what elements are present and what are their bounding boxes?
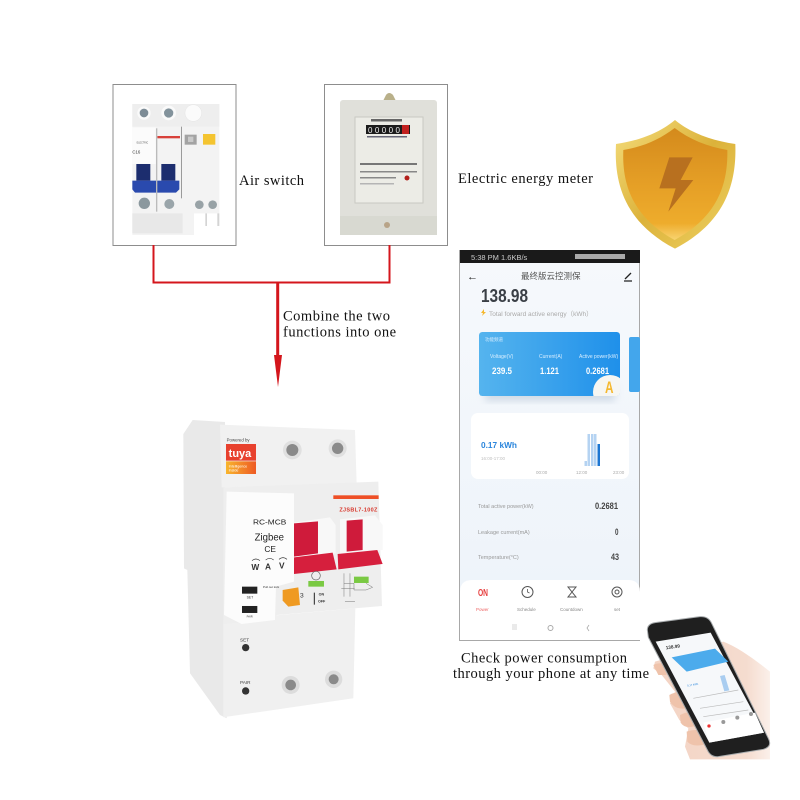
bottom terminal screws xyxy=(282,671,342,694)
set and pair sliders: SET xyxy=(247,595,253,599)
on/off marking: OFF xyxy=(318,600,326,604)
set button xyxy=(240,637,249,651)
bottom navigation: Power xyxy=(476,607,489,612)
caption: check power consumption: through your phone at any time xyxy=(453,666,649,682)
label: air switch: Air switch xyxy=(239,173,305,189)
icon: air switch photo: C16 xyxy=(132,150,141,155)
energy chart card: 12:00 xyxy=(576,470,588,475)
green indicators xyxy=(308,577,369,587)
set and pair sliders xyxy=(242,587,257,619)
bottom navigation: Schedule xyxy=(517,607,536,612)
blue measurement card: 239.5 xyxy=(492,366,513,377)
phone screen: 0.17 kWh xyxy=(687,682,699,688)
breaker toggle right xyxy=(338,515,383,569)
set and pair sliders: PAIR xyxy=(247,615,253,619)
tuya logo: tuya xyxy=(229,448,252,460)
blue measurement card: A xyxy=(605,378,614,397)
card shadow xyxy=(485,385,615,401)
phone screenshot panel xyxy=(460,250,640,640)
energy chart card: 16:00-17:00 xyxy=(481,456,506,461)
icon: gold shield with lightning bolt xyxy=(616,120,735,249)
set button: SET xyxy=(240,637,249,642)
icon: air switch photo: ELECTRIC xyxy=(137,143,148,145)
tuya logo: Inside xyxy=(229,469,238,473)
on/off marking: ON xyxy=(319,592,324,596)
meters W A V: W xyxy=(251,562,259,572)
data rows: Leakage current(mA) xyxy=(478,530,530,536)
label: RC-MCB: RC-MCB xyxy=(253,517,286,526)
data rows: Temperature(°C) xyxy=(478,555,519,561)
blue measurement card: Active power(kW) xyxy=(579,354,619,360)
blue measurement card: 功能频道 xyxy=(485,336,503,343)
caption: check power consumption xyxy=(453,651,649,682)
text: combine the two functions: Combine the two xyxy=(283,308,390,324)
white label panel xyxy=(224,492,294,624)
status bar xyxy=(460,250,640,263)
certification mark xyxy=(312,571,320,580)
pair button: PAIR xyxy=(240,680,251,685)
meters W A V: V xyxy=(279,561,285,571)
energy value: 138.98 xyxy=(481,286,528,306)
energy chart card xyxy=(471,413,629,479)
hand holding phone xyxy=(647,617,770,759)
data rows: 0 xyxy=(615,527,618,538)
back arrow: ← xyxy=(467,271,478,283)
middle block xyxy=(223,482,382,624)
energy chart card: 23:00 xyxy=(613,470,625,475)
bottom navigation: ON xyxy=(478,588,488,599)
red accent bar xyxy=(333,495,379,499)
arrow: down to breaker xyxy=(274,355,282,387)
label: electric energy meter: Electric energy meter xyxy=(458,171,593,187)
phone screen: 138.99 xyxy=(665,643,681,650)
breaker toggle left xyxy=(294,517,337,574)
bottom navigation xyxy=(460,580,640,640)
on/off marking: 3 xyxy=(300,592,304,599)
text: combine the two functions: functions into one xyxy=(283,325,396,341)
icon: air switch photo xyxy=(132,104,219,235)
data rows xyxy=(478,501,619,563)
pair button xyxy=(240,680,251,695)
wiring diagram xyxy=(341,573,373,602)
side rail xyxy=(183,420,227,718)
blue measurement card xyxy=(479,332,620,396)
fingers xyxy=(653,663,708,745)
label: CE: CE xyxy=(264,544,276,554)
phone body xyxy=(647,617,770,757)
top terminal screws xyxy=(283,439,347,459)
on/off marking xyxy=(300,592,326,605)
bottom navigation: Countdown xyxy=(560,607,583,612)
bottom navigation: set xyxy=(614,607,621,612)
blue measurement card: 0.2681 xyxy=(586,366,610,377)
energy chart card: 00:00 xyxy=(536,470,548,475)
data rows: Total active power(kW) xyxy=(478,504,534,510)
breaker device xyxy=(183,420,383,718)
screen title: 最终版云控测保 xyxy=(521,271,581,281)
tuya logo xyxy=(226,438,256,474)
edit icon xyxy=(624,273,632,281)
hand xyxy=(653,642,770,759)
next card peek xyxy=(629,337,640,392)
meters W A V: A xyxy=(265,561,271,571)
top block xyxy=(220,425,357,487)
status bar: 5:38 PM 1.6KB/s xyxy=(471,253,528,262)
energy chart card: 0.17 kWh xyxy=(481,440,517,450)
model label: ZJSBL7-100Z xyxy=(339,507,378,513)
blue measurement card: Voltage(V) xyxy=(490,354,514,360)
caption: check power consumption: Check power consumption xyxy=(461,651,628,667)
energy caption: Total forward active energy（kWh） xyxy=(489,310,593,318)
orange lock tab xyxy=(283,587,300,607)
blue measurement card: Current(A) xyxy=(539,354,563,360)
blue measurement card: 1.121 xyxy=(540,366,560,377)
phone screen xyxy=(656,633,764,743)
tuya logo: Intelligence xyxy=(229,464,247,468)
lower block xyxy=(223,608,355,717)
meters W A V xyxy=(251,558,287,572)
icon: energy meter photo xyxy=(340,93,437,235)
connector: red lines joining both panels xyxy=(154,245,390,362)
data rows: 43 xyxy=(611,552,619,563)
panel: electric energy meter xyxy=(324,84,448,246)
text: combine the two functions xyxy=(283,308,396,341)
lock caption: Pull out lock xyxy=(263,585,280,589)
label: Zigbee: Zigbee xyxy=(255,533,284,544)
tuya logo: Powered by xyxy=(227,438,250,443)
panel: air switch xyxy=(113,84,236,246)
icon: energy meter photo: 00000 xyxy=(368,126,401,135)
data rows: 0.2681 xyxy=(595,501,619,512)
